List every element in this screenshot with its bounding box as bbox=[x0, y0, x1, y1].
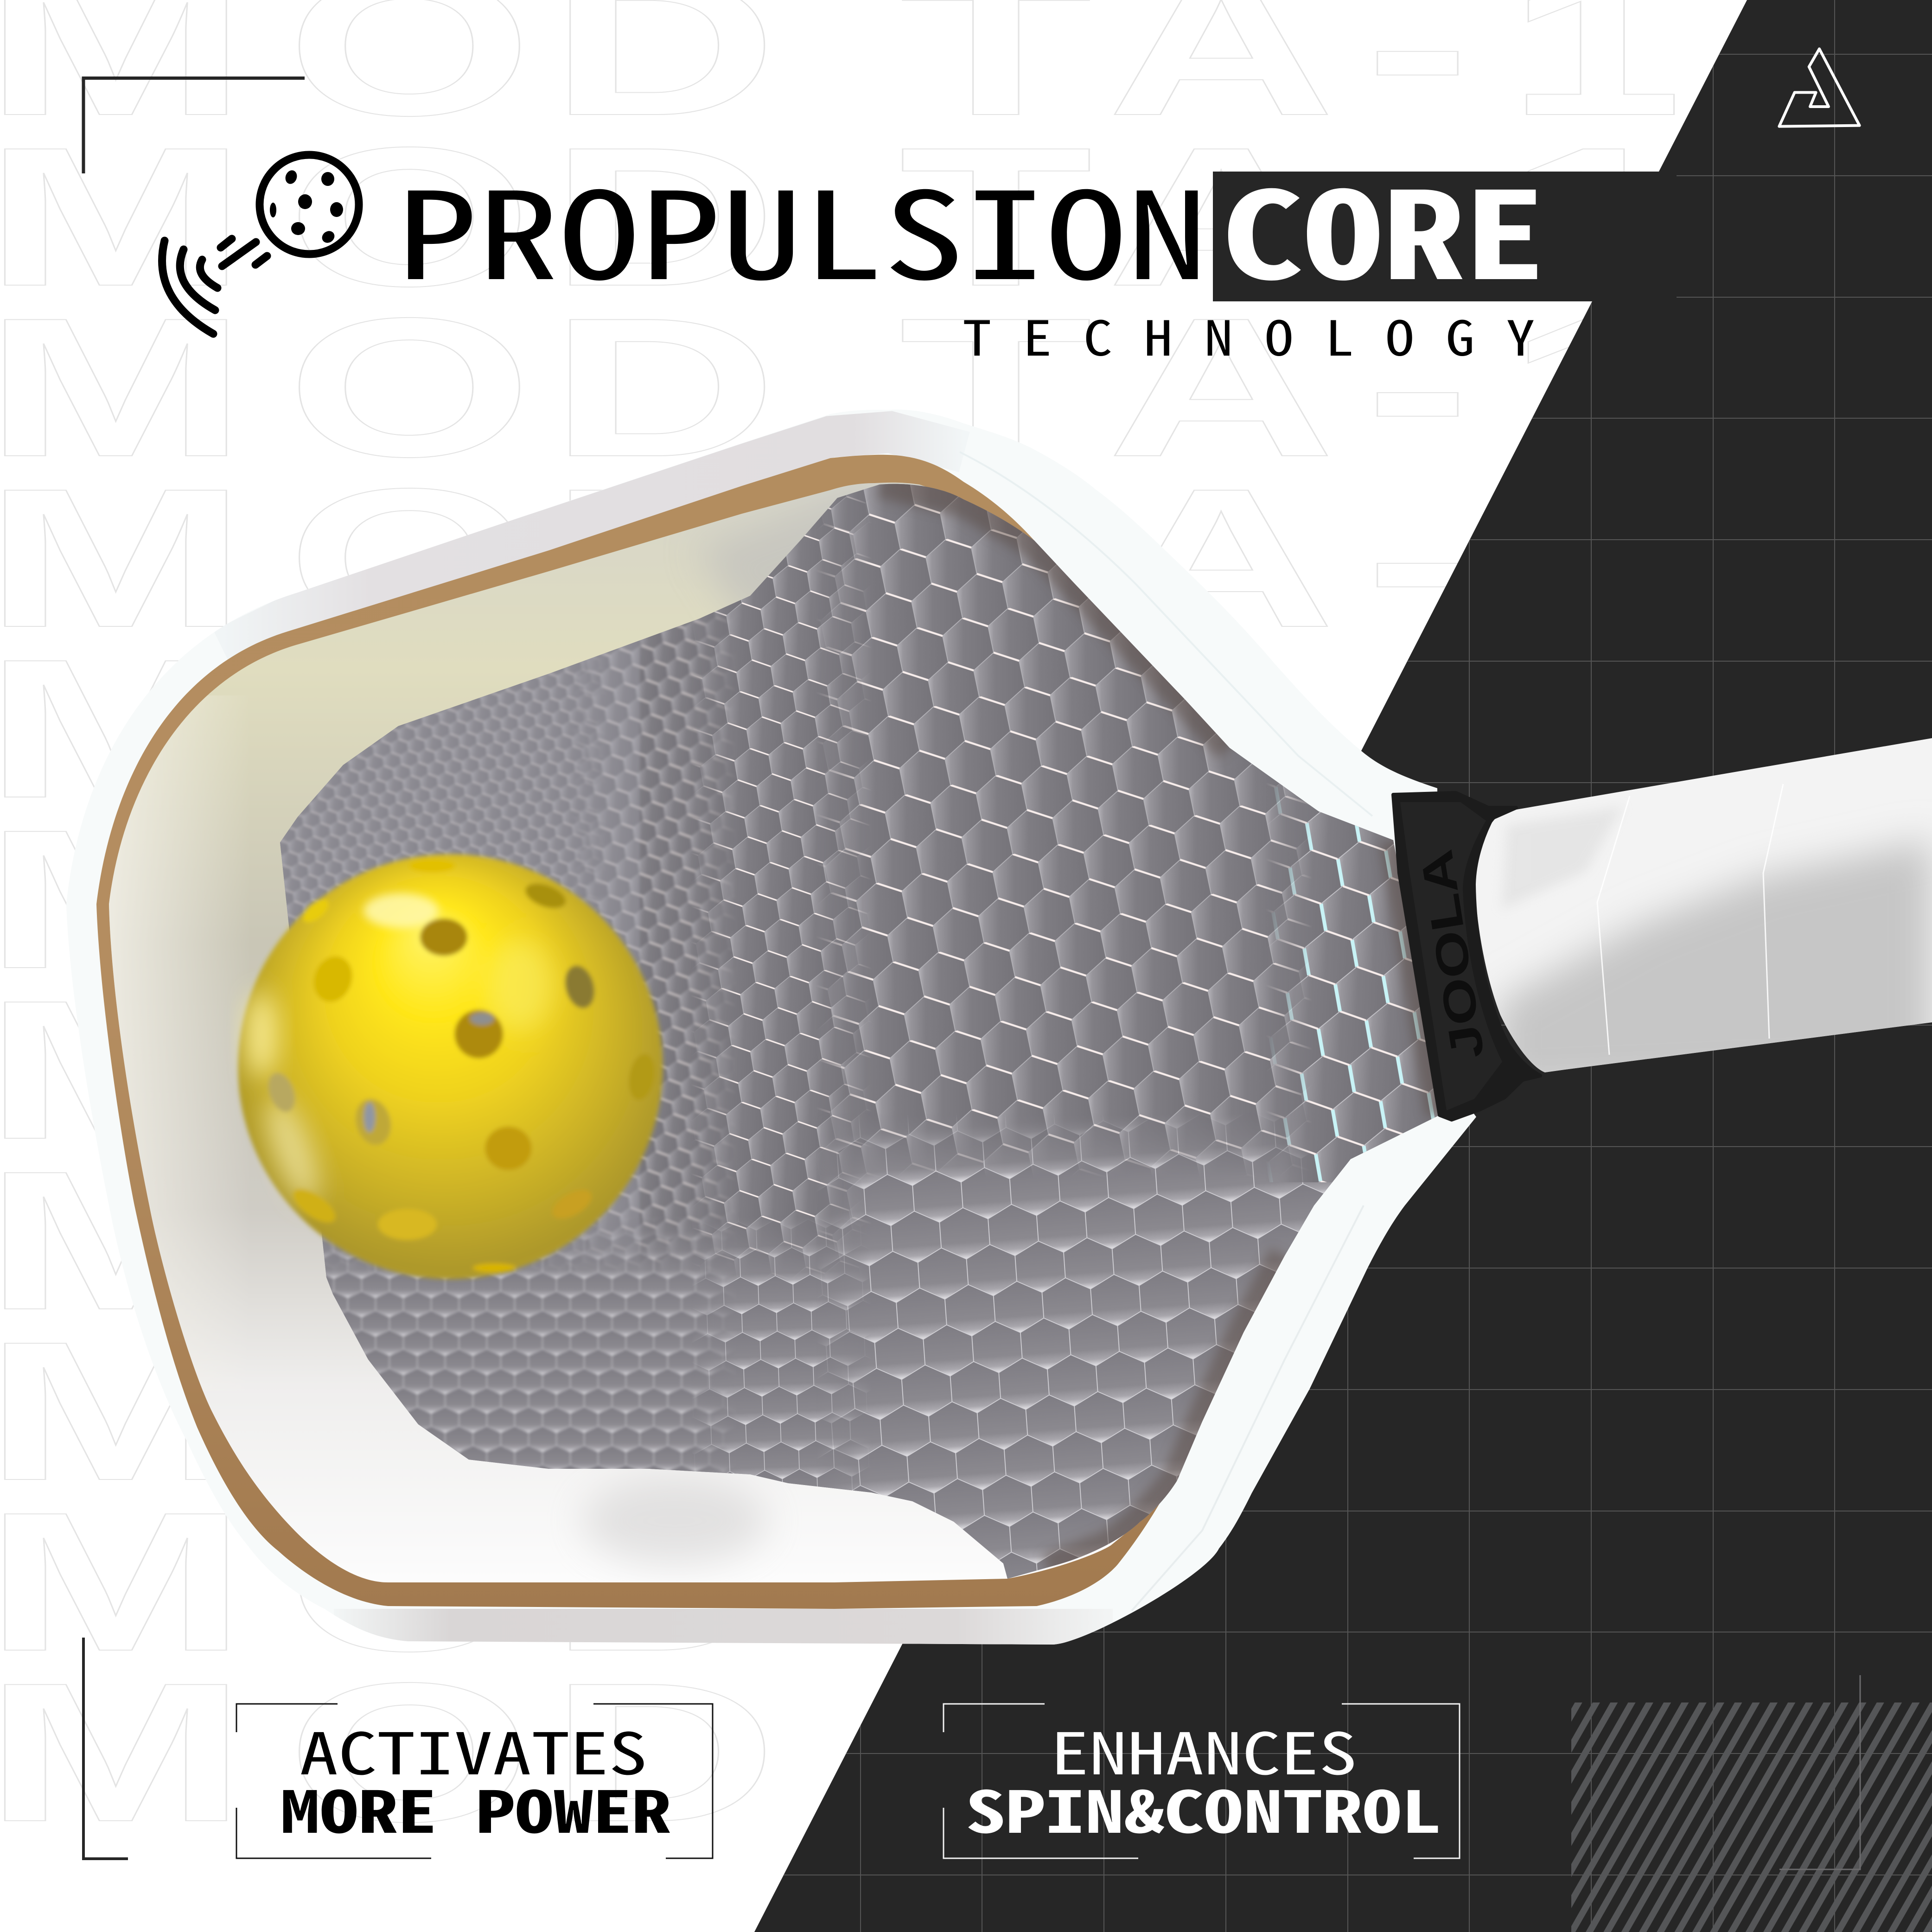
bracket top left bbox=[83, 78, 305, 173]
logo: triangular brand mark bbox=[1779, 49, 1860, 127]
watermark outlined text rows: MOD bbox=[0, 618, 778, 839]
callout: activates more power: ACTIVATES bbox=[300, 1708, 647, 1791]
inner foam wall bbox=[109, 482, 1140, 1582]
subtitle: TECHNOLOGY: TECHNOLOGY bbox=[963, 300, 1535, 370]
title highlight box bbox=[1213, 172, 1677, 301]
wood edge layer bbox=[96, 455, 1252, 1609]
watermark outlined text rows: MOD bbox=[0, 788, 778, 1010]
watermark outlined text rows: TA-1 bbox=[899, 959, 1683, 1180]
watermark outlined text rows: TA-1 bbox=[899, 1300, 1683, 1522]
bracket bottom right bbox=[1779, 1675, 1860, 1869]
diagonal stripe block bbox=[1571, 1702, 1932, 1932]
callout: enhances spin and control: ENHANCES bbox=[1051, 1708, 1357, 1791]
callout: enhances spin and control bbox=[944, 1704, 1460, 1858]
callout: activates more power: MORE POWER bbox=[281, 1766, 671, 1849]
watermark outlined text rows: MOD bbox=[0, 106, 778, 327]
title: CORE: CORE bbox=[1222, 139, 1545, 314]
callout: activates more power bbox=[236, 1704, 713, 1858]
watermark outlined text rows: TA-1 bbox=[899, 1129, 1683, 1351]
watermark outlined text rows: TA-1 bbox=[899, 447, 1683, 669]
icon: ball with speed waves bbox=[162, 155, 359, 334]
watermark outlined text rows: TA-1 bbox=[899, 618, 1683, 839]
paddle frame bbox=[66, 409, 1476, 1645]
callout: enhances spin and control: SPIN&CONTROL bbox=[966, 1766, 1441, 1849]
pickleball bbox=[238, 854, 663, 1279]
watermark outlined text rows: MOD bbox=[0, 447, 778, 669]
paddle illustration bbox=[66, 409, 1932, 1645]
grip handle bbox=[1470, 733, 1932, 1094]
collar with JOOLA logo: JOOLA bbox=[1410, 846, 1494, 1063]
watermark outlined text rows: TA-1 bbox=[899, 1641, 1683, 1863]
bracket bottom left bbox=[83, 1638, 128, 1859]
dark diagonal panel bbox=[754, 0, 1932, 1932]
watermark outlined text rows: MOD bbox=[0, 1471, 778, 1692]
collar with JOOLA logo bbox=[1393, 793, 1540, 1120]
watermark outlined text rows: TA-1 bbox=[899, 788, 1683, 1010]
watermark outlined text rows: MOD bbox=[0, 959, 778, 1180]
watermark outlined text rows: MOD bbox=[0, 276, 778, 498]
watermark outlined text rows: TA-1 bbox=[899, 106, 1683, 327]
watermark outlined text rows: MOD bbox=[0, 1300, 778, 1522]
watermark outlined text rows: MOD bbox=[0, 1129, 778, 1351]
watermark outlined text rows: TA-1 bbox=[899, 276, 1683, 498]
honeycomb core bbox=[269, 464, 1474, 1623]
title: PROPULSION: PROPULSION bbox=[396, 139, 1208, 314]
watermark outlined text rows: MOD bbox=[0, 1641, 778, 1863]
watermark outlined text rows: TA-1 bbox=[899, 1471, 1683, 1692]
